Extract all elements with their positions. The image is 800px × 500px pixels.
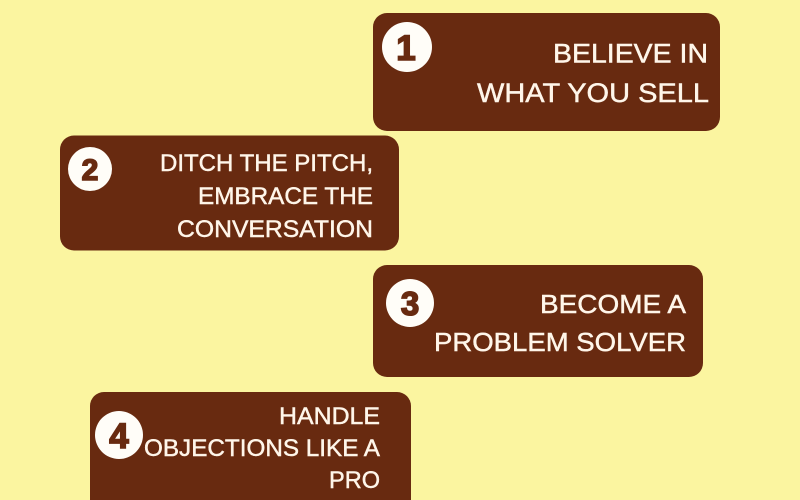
text: become a problem solver (434, 289, 687, 357)
icon: number 4 badge (95, 411, 143, 459)
panel: step 3 (373, 265, 703, 377)
text: believe in what you sell: WHAT YOU SELL (477, 78, 709, 108)
icon: number 1 badge (382, 22, 432, 72)
icon: number 1 badge: 1 (396, 29, 416, 68)
icon: number 2 badge: 2 (82, 154, 98, 187)
text: become a problem solver: PROBLEM SOLVER (434, 327, 686, 357)
icon: number 4 badge: 4 (109, 417, 129, 456)
text: ditch the pitch, embrace the conversation (160, 150, 373, 243)
icon: number 2 badge (68, 147, 112, 191)
text: ditch the pitch, embrace the conversation: DITCH THE PITCH, (160, 150, 373, 177)
icon: number 3 badge: 3 (401, 285, 419, 322)
text: believe in what you sell: BELIEVE IN (553, 38, 708, 68)
panel: step 1 (373, 13, 720, 131)
text: ditch the pitch, embrace the conversation: CONVERSATION (177, 216, 373, 243)
text: ditch the pitch, embrace the conversation: EMBRACE THE (198, 183, 373, 210)
panel: step 4 (90, 392, 411, 500)
icon: number 3 badge (386, 279, 434, 327)
panel: step 2 (60, 136, 399, 250)
text: become a problem solver: BECOME A (540, 289, 687, 319)
text: believe in what you sell (477, 38, 709, 108)
text: handle objections like a pro: PRO (329, 467, 380, 494)
text: handle objections like a pro (144, 403, 380, 494)
text: handle objections like a pro: HANDLE (279, 403, 380, 430)
text: handle objections like a pro: OBJECTIONS LIKE A (144, 435, 380, 462)
